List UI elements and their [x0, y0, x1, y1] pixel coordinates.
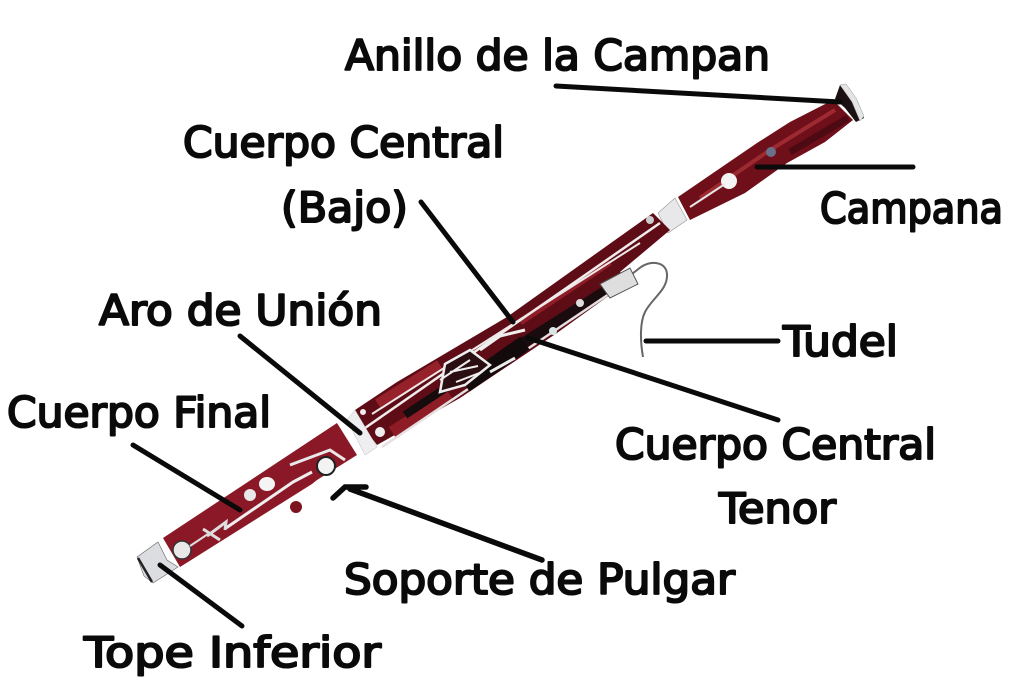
leader: cuerpo final	[133, 445, 240, 510]
tudel bocal	[628, 263, 667, 357]
label: Aro de Unión: Aro de Unión	[99, 286, 382, 335]
leader: anillo de la campana	[556, 86, 840, 102]
leader: cuerpo central tenor	[528, 338, 778, 420]
leader: campana	[757, 164, 913, 170]
label: Anillo de la Campan: Anillo de la Campan	[345, 31, 770, 80]
butt joint	[163, 423, 357, 567]
label: Tudel: Tudel	[782, 317, 898, 366]
leader: tope inferior	[160, 565, 242, 626]
bell joint	[678, 84, 864, 220]
label: Cuerpo Central (Bajo): (Bajo)	[281, 183, 408, 232]
label: Cuerpo Final: Cuerpo Final	[7, 388, 271, 437]
label: Cuerpo Central (Bajo)	[183, 118, 504, 232]
wing and long joints	[355, 213, 670, 447]
label: Campana: Campana	[820, 184, 1003, 233]
union silver collar	[347, 410, 377, 455]
label: Cuerpo Central Tenor	[615, 420, 936, 533]
upper silver rings	[658, 198, 687, 233]
label: Cuerpo Central (Bajo): Cuerpo Central	[183, 118, 504, 167]
leader: cuerpo central bajo	[421, 202, 513, 322]
leader lines	[133, 86, 913, 626]
leader: tudel	[646, 338, 778, 344]
leader: soporte de pulgar	[333, 487, 542, 560]
label: Cuerpo Central Tenor: Tenor	[718, 484, 837, 533]
label: Soporte de Pulgar: Soporte de Pulgar	[344, 555, 736, 604]
leader: aro de union	[240, 336, 360, 433]
label: Tope Inferior: Tope Inferior	[83, 628, 382, 677]
bottom silver cap	[137, 542, 178, 583]
label: Cuerpo Central Tenor: Cuerpo Central	[615, 420, 936, 469]
bassoon instrument	[137, 84, 864, 583]
